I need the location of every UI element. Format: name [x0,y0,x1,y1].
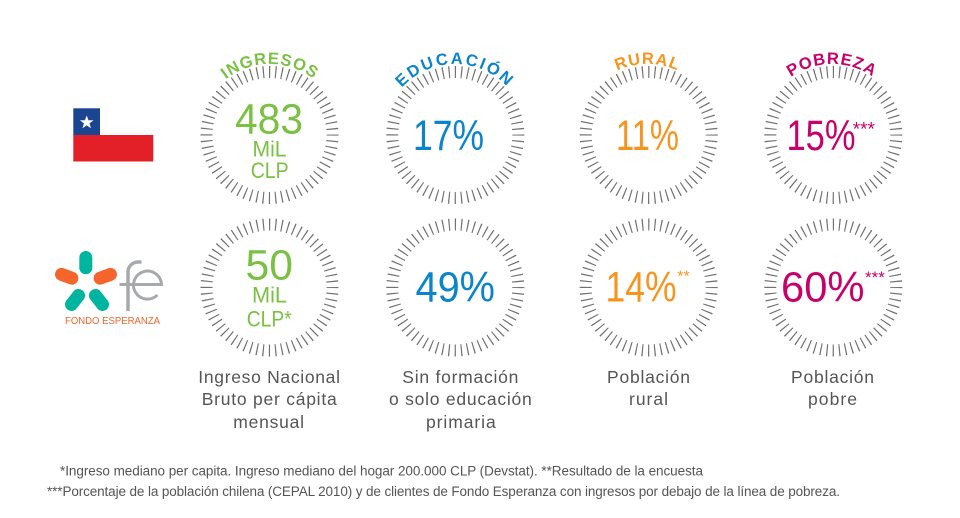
text: rural caption: Población [607,367,690,387]
panel: educación Chile [386,52,524,204]
text: pobreza caption: pobre [808,389,857,409]
text: educación caption: Sin formación [402,367,518,387]
panel: rural Chile: RURAL [614,52,678,70]
icon: Fondo Esperanza logo: FONDO ESPERANZA [65,315,160,327]
text: footnotes: ***Porcentaje de la población chilena (CEPAL 2010) y de clientes de Fondo Esperanza con ingresos por debajo de la línea de pobreza. [47,484,840,499]
panel: rural Chile: 11% [616,112,679,160]
panel: pobreza Chile: *** [853,120,875,140]
text: footnotes: *Ingreso mediano per capita. Ingreso mediano del hogar 200.000 CLP (Devstat). **Resultado de la encuesta [60,464,703,478]
icon: Fondo Esperanza logo [53,251,161,327]
panel: educación Chile: 17% [413,112,484,160]
panel: pobreza Chile [764,52,902,204]
panel: educación Fondo Esperanza: 49% [416,264,495,312]
panel: pobreza Fondo Esperanza: *** [865,268,885,287]
panel: rural Chile [580,52,718,204]
panel: ingresos Fondo Esperanza: MiL [252,282,287,308]
panel: ingresos Chile [200,52,338,204]
panel: pobreza Chile: POBREZA [786,52,874,76]
panel: pobreza Fondo Esperanza [770,224,896,350]
text: educación caption: o solo educación [389,389,532,409]
panel: ingresos Fondo Esperanza [206,224,332,350]
panel: ingresos Chile: CLP [251,158,289,183]
panel: educación Fondo Esperanza [392,224,518,350]
panel: ingresos Chile: 483 [235,96,303,144]
panel: ingresos Chile: MiL [252,136,286,162]
text: educación caption: primaria [426,412,496,432]
panel: pobreza Fondo Esperanza: 60% [781,264,864,312]
text: ingreso caption: mensual [233,412,304,432]
text: ingreso caption: Bruto per cápita [202,389,337,409]
panel: rural Fondo Esperanza: ** [677,269,690,286]
panel: ingresos Fondo Esperanza: 50 [246,242,293,290]
panel: ingresos Chile: INGRESOS [220,52,318,79]
text: pobreza caption: Población [791,367,874,387]
panel: rural Fondo Esperanza [586,224,712,350]
panel: pobreza Chile: 15% [786,112,856,160]
text: rural caption: rural [629,389,668,409]
text: ingreso caption: Ingreso Nacional [198,367,340,387]
panel: ingresos Fondo Esperanza: CLP* [247,306,292,332]
panel: educación Chile: EDUCACIÓN [394,52,514,87]
icon: Chile flag [73,108,153,162]
panel: rural Fondo Esperanza: 14% [606,264,676,312]
